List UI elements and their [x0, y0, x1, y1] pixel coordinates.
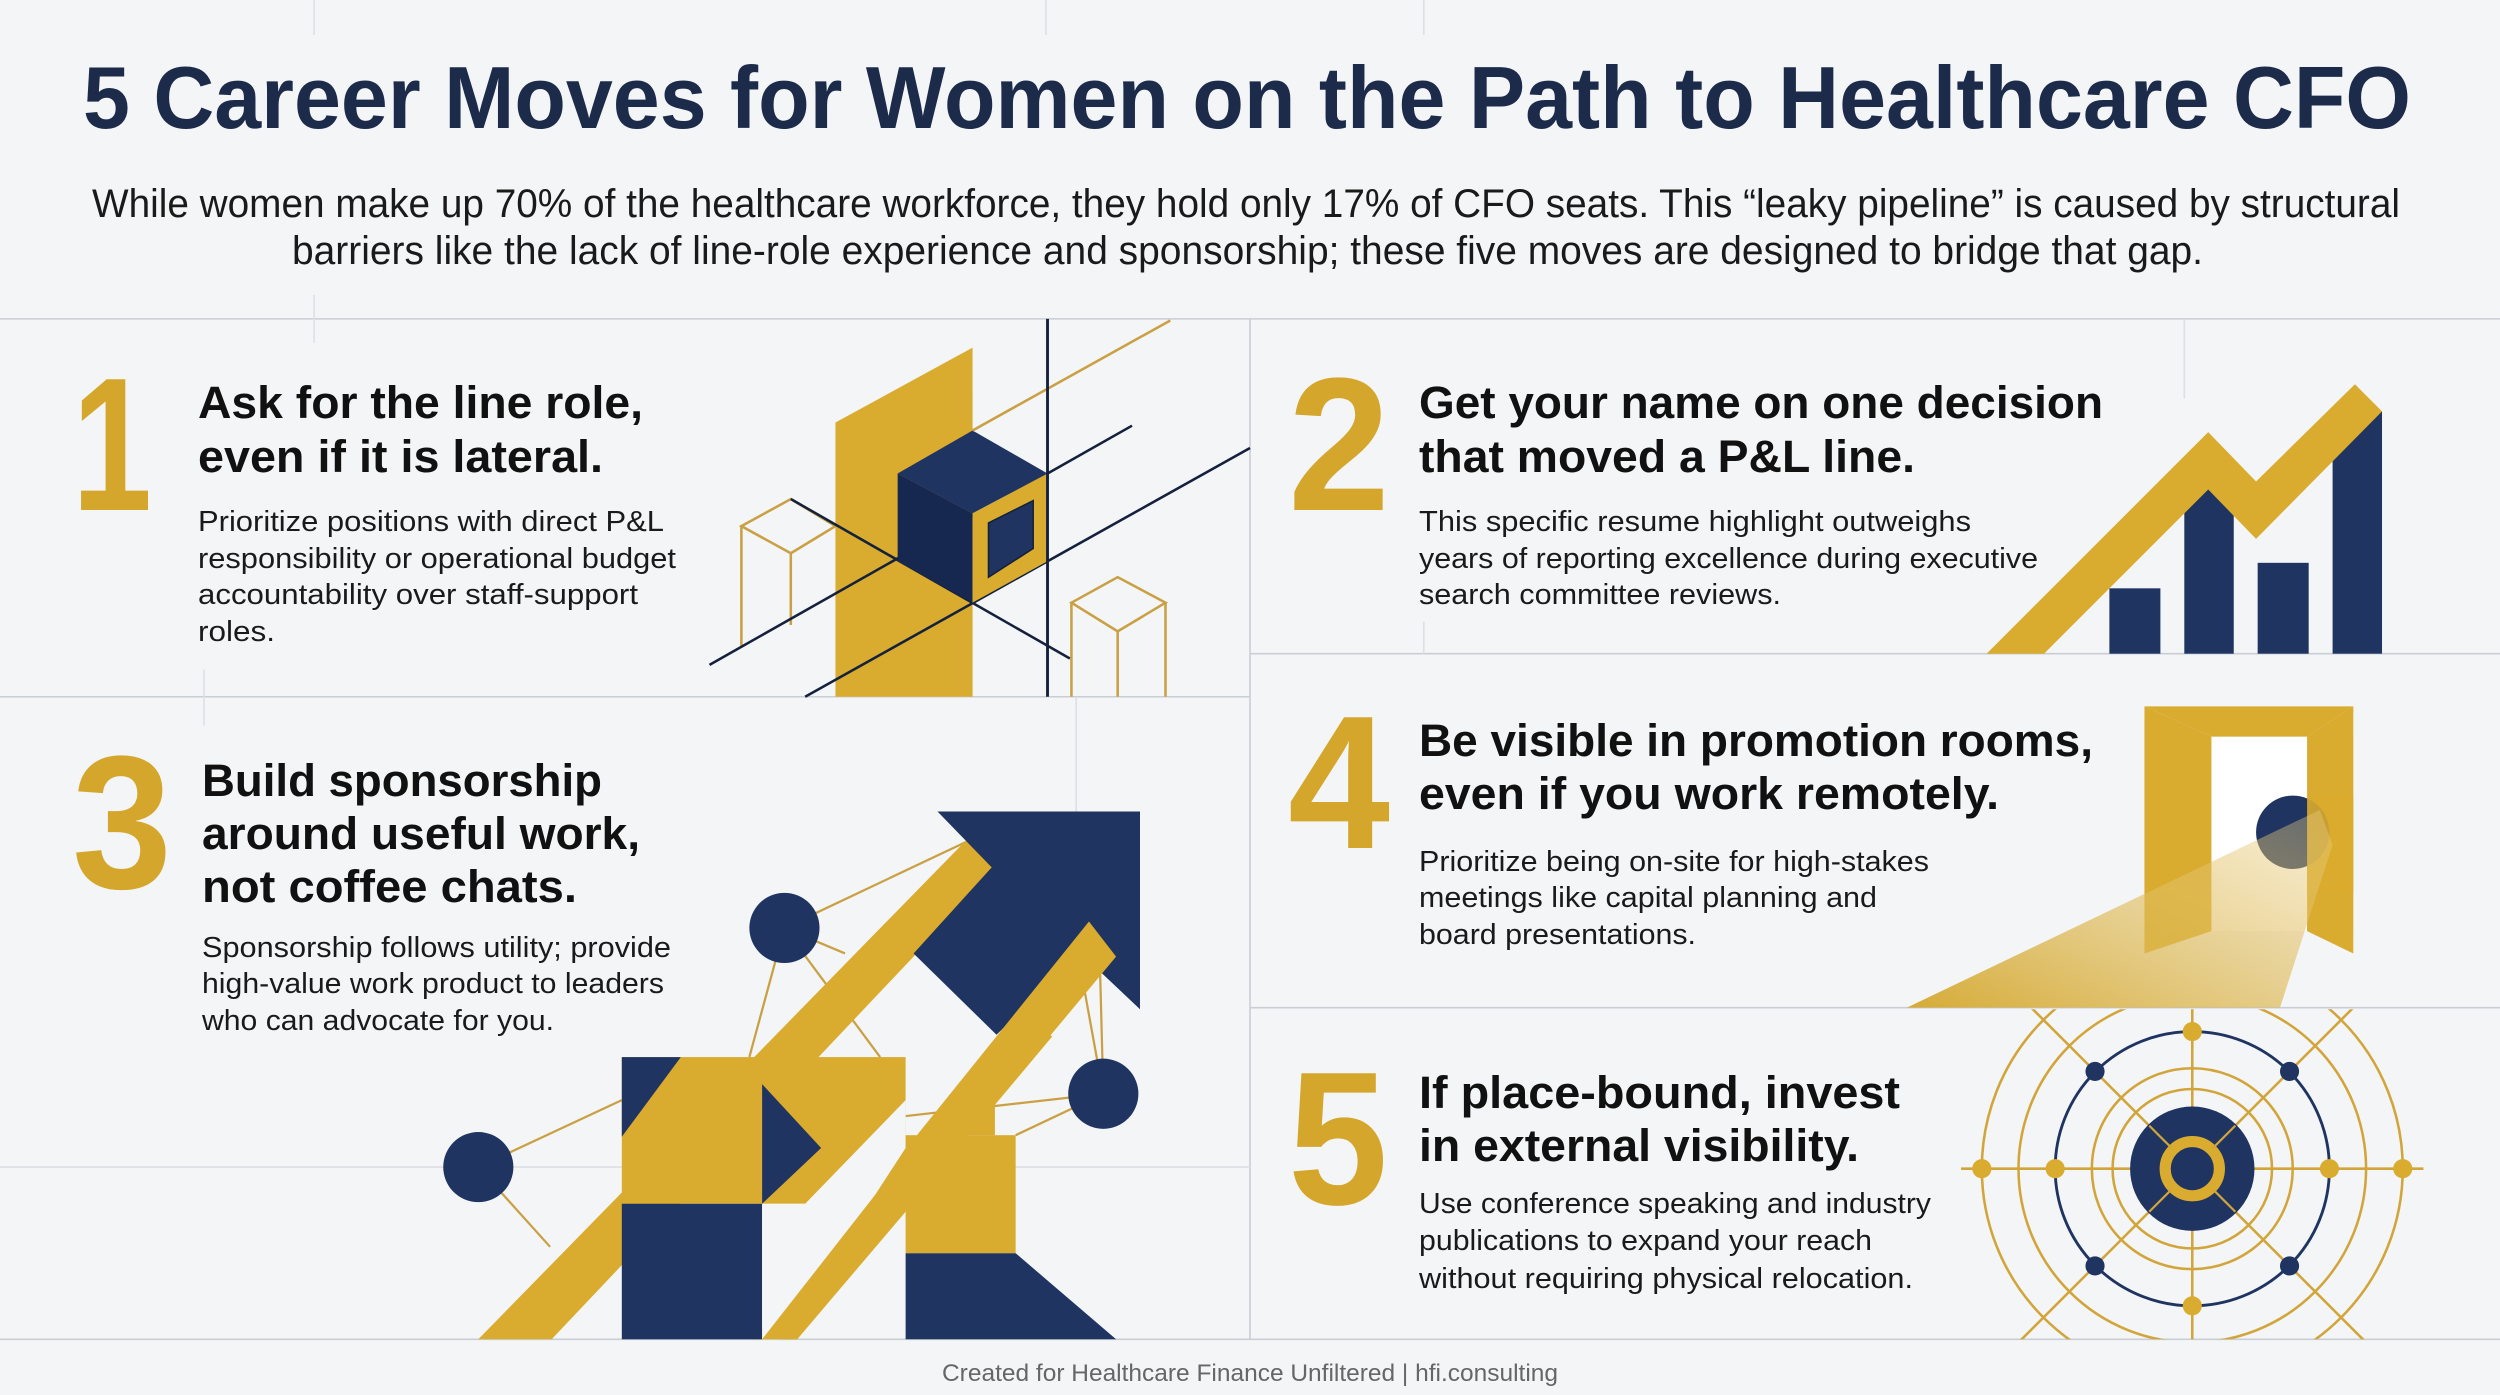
body 5: Use conference speaking and industry: [1419, 1188, 1932, 1220]
body 5: [1418, 1188, 1932, 1295]
illustration: network and upward arrow: [443, 812, 1140, 1339]
heading 4: Be visible in promotion rooms,: [1419, 715, 2093, 766]
body 4: Prioritize being on-site for high-stakes: [1419, 846, 1929, 878]
body 2: search committee reviews.: [1419, 579, 1781, 611]
heading 2: that moved a P&L line.: [1419, 431, 1915, 482]
heading 2: [1419, 377, 2103, 482]
body 5: without requiring physical relocation.: [1418, 1263, 1913, 1295]
body 2: This specific resume highlight outweighs: [1419, 506, 1971, 538]
heading 3: Build sponsorship: [202, 755, 602, 806]
panel: move 1: [72, 319, 1250, 697]
number 2: 2: [1288, 339, 1390, 551]
body 4: meetings like capital planning and: [1419, 882, 1877, 914]
heading 3: [202, 755, 640, 912]
body 4: [1419, 846, 1929, 951]
panel: move 5: [1294, 1009, 2424, 1340]
heading 5: in external visibility.: [1419, 1120, 1859, 1171]
heading 3: not coffee chats.: [202, 861, 577, 912]
number 3: 3: [72, 717, 172, 929]
body 3: high-value work product to leaders: [202, 968, 664, 1000]
panel: move 3: [72, 717, 1140, 1339]
panel: move 4: [1288, 677, 2353, 1008]
body 3: who can advocate for you.: [201, 1005, 554, 1037]
title: 5 Career Moves for Women on the Path to Healthcare CFO: [83, 48, 2411, 147]
heading 5: If place-bound, invest: [1419, 1067, 1900, 1118]
body 3: [201, 932, 671, 1037]
icon: open door with light beam: [1907, 706, 2353, 1008]
panel: move 2: [1288, 339, 2382, 654]
body 5: publications to expand your reach: [1419, 1225, 1872, 1257]
heading 5: [1419, 1067, 1900, 1171]
subtitle: [92, 182, 2400, 273]
heading 2: Get your name on one decision: [1419, 377, 2103, 428]
subtitle: While women make up 70% of the healthcare workforce, they hold only 17% of CFO seats. This “leaky pipeline” is caused by structural: [92, 182, 2400, 226]
heading 4: even if you work remotely.: [1419, 768, 1999, 819]
number 5: 5: [1288, 1033, 1388, 1245]
body 2: years of reporting excellence during executive: [1419, 543, 2038, 575]
heading 4: [1419, 715, 2093, 819]
illustration: isometric cube: [710, 319, 1250, 697]
heading 1: even if it is lateral.: [198, 431, 603, 482]
body 1: accountability over staff-support: [198, 579, 638, 611]
body 1: roles.: [198, 616, 275, 648]
heading 1: [198, 377, 643, 482]
number 4: 4: [1288, 677, 1390, 889]
number 1: 1: [72, 339, 152, 551]
body 4: board presentations.: [1419, 919, 1696, 951]
body 1: [198, 506, 676, 648]
footer: Created for Healthcare Finance Unfiltered | hfi.consulting: [942, 1360, 1558, 1387]
heading 3: around useful work,: [202, 808, 640, 859]
body 2: [1419, 506, 2038, 611]
body 1: Prioritize positions with direct P&L: [198, 506, 664, 538]
body 1: responsibility or operational budget: [198, 543, 676, 575]
chart: rising bars with gold trend line: [1987, 384, 2382, 654]
subtitle: barriers like the lack of line-role experience and sponsorship; these five moves are designed to bridge that gap.: [292, 229, 2203, 273]
body 3: Sponsorship follows utility; provide: [202, 932, 671, 964]
icon: radar target: [1961, 1009, 2424, 1340]
heading 1: Ask for the line role,: [198, 377, 643, 428]
